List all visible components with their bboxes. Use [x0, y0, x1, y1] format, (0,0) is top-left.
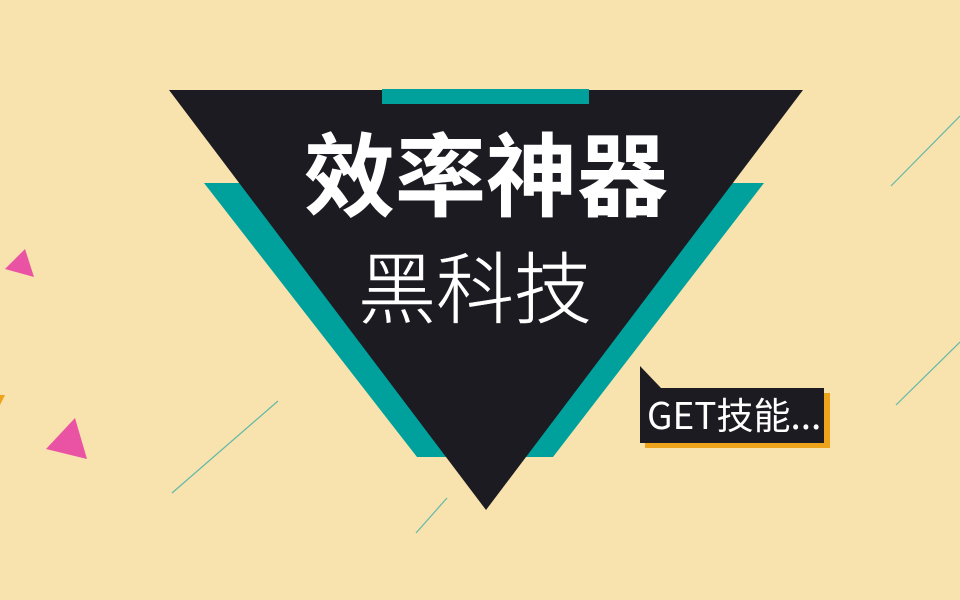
icon: large pink triangle — [46, 418, 87, 459]
icon: orange triangle fragment — [0, 395, 5, 405]
teal top bar — [382, 89, 589, 104]
callout: GET技能 — [640, 366, 830, 448]
title: 效率神器 — [304, 104, 668, 236]
subtitle: 黑科技 — [358, 228, 592, 340]
teal back triangle — [204, 183, 764, 457]
icon: small pink triangle — [5, 249, 34, 277]
dark main triangle — [169, 90, 803, 510]
callout: GET技能: GET技能... — [647, 386, 821, 440]
